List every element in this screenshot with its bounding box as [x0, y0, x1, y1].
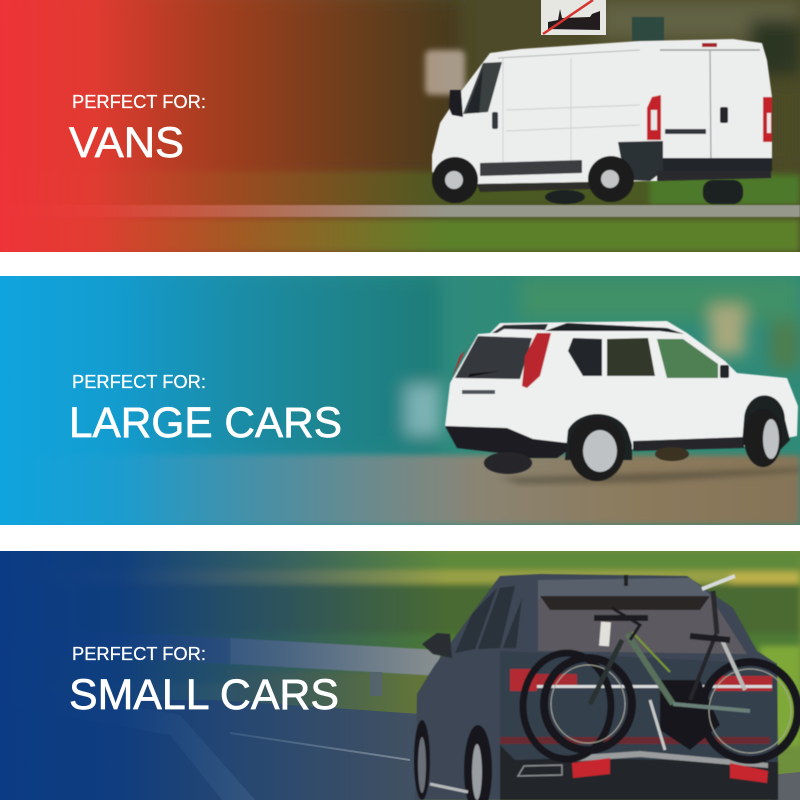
text: perfect for vans: PERFECT FOR: — [72, 91, 206, 112]
text: perfect for vans: VANS — [69, 119, 184, 167]
panel: vans — [0, 0, 800, 252]
car wheels — [414, 720, 492, 800]
text: perfect for large cars: PERFECT FOR: — [72, 371, 206, 392]
photo background: fields and road — [118, 551, 800, 800]
road sign — [541, 0, 606, 35]
suv wheels — [483, 418, 781, 482]
icon: dark car with bikes — [414, 574, 798, 800]
photo background: trees and road — [0, 0, 800, 252]
text: perfect for small cars: PERFECT FOR: — [72, 643, 206, 664]
text: perfect for small cars: SMALL CARS — [69, 671, 339, 719]
panel: large cars — [0, 276, 800, 525]
text: perfect for large cars — [72, 374, 340, 438]
panel: small cars — [0, 551, 800, 800]
text: perfect for vans — [68, 94, 204, 158]
navy gradient overlay — [0, 551, 430, 800]
blue gradient overlay — [0, 276, 450, 525]
text: perfect for large cars: LARGE CARS — [69, 399, 342, 447]
icon: white suv — [445, 321, 798, 481]
red gradient overlay — [0, 0, 425, 252]
text: perfect for small cars — [70, 646, 338, 710]
photo background: lake and gravel — [0, 276, 800, 525]
bicycles — [523, 576, 798, 760]
van wheels — [432, 156, 743, 204]
icon: white van — [432, 39, 772, 204]
